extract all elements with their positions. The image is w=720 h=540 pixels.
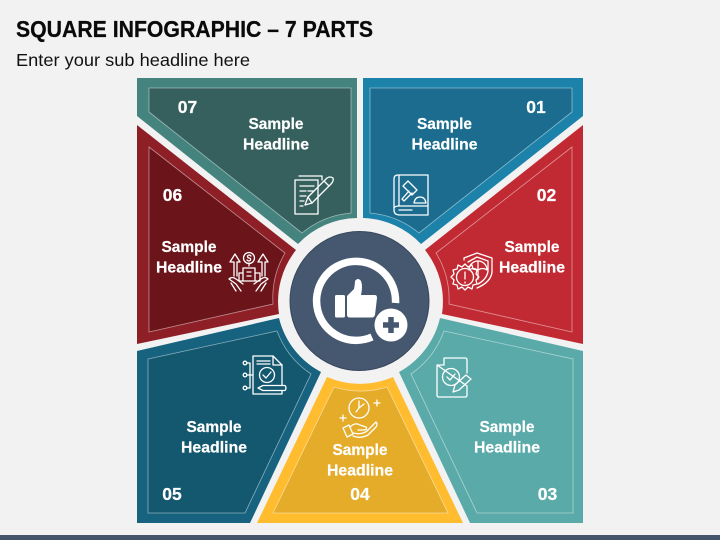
heading 01: Headline <box>412 136 478 154</box>
icon: clock over hand <box>340 398 380 437</box>
heading 03: Sample <box>480 419 535 436</box>
panel: 04 <box>257 377 463 523</box>
footer bar <box>0 535 720 540</box>
icon: document with check and pen <box>437 358 471 397</box>
icon: document with nodes and pencil <box>243 356 286 394</box>
heading 05: Headline <box>181 440 247 456</box>
heading 01: Sample <box>417 116 472 133</box>
number 05: 05 <box>162 484 182 504</box>
center circle <box>290 232 429 370</box>
icon: growth arrows, building and hands <box>229 252 268 291</box>
panel: 01 <box>363 78 583 244</box>
panel: 07 <box>137 78 357 244</box>
number 06: 06 <box>163 185 182 205</box>
heading 06: Sample <box>162 239 217 256</box>
heading 03: Headline <box>474 440 540 456</box>
heading 07: Headline <box>243 136 309 154</box>
panel: 02 <box>425 125 583 344</box>
panel: 06 <box>137 125 296 344</box>
icon: thumbs up with plus <box>317 261 408 342</box>
heading 06: Headline <box>156 260 222 276</box>
heading 07: Sample <box>248 116 304 133</box>
icon: law book and gavel <box>394 175 428 215</box>
number 07: 07 <box>178 97 197 117</box>
panel: 05 <box>137 318 321 523</box>
number 01: 01 <box>526 97 546 117</box>
title: SQUARE INFOGRAPHIC – 7 PARTS <box>16 16 373 42</box>
panel: 03 <box>399 318 583 523</box>
subtitle: Enter your sub headline here <box>16 50 250 70</box>
heading 05: Sample <box>186 419 242 436</box>
number 02: 02 <box>537 185 556 205</box>
heading 02: Sample <box>504 239 560 256</box>
heading 02: Headline <box>499 260 565 276</box>
icon: shield, umbrella and warning gear <box>451 253 492 290</box>
number 03: 03 <box>538 484 557 504</box>
number 04: 04 <box>350 484 370 504</box>
heading 04: Headline <box>327 462 393 480</box>
icon: document and pen <box>295 176 333 214</box>
heading 04: Sample <box>332 442 388 459</box>
